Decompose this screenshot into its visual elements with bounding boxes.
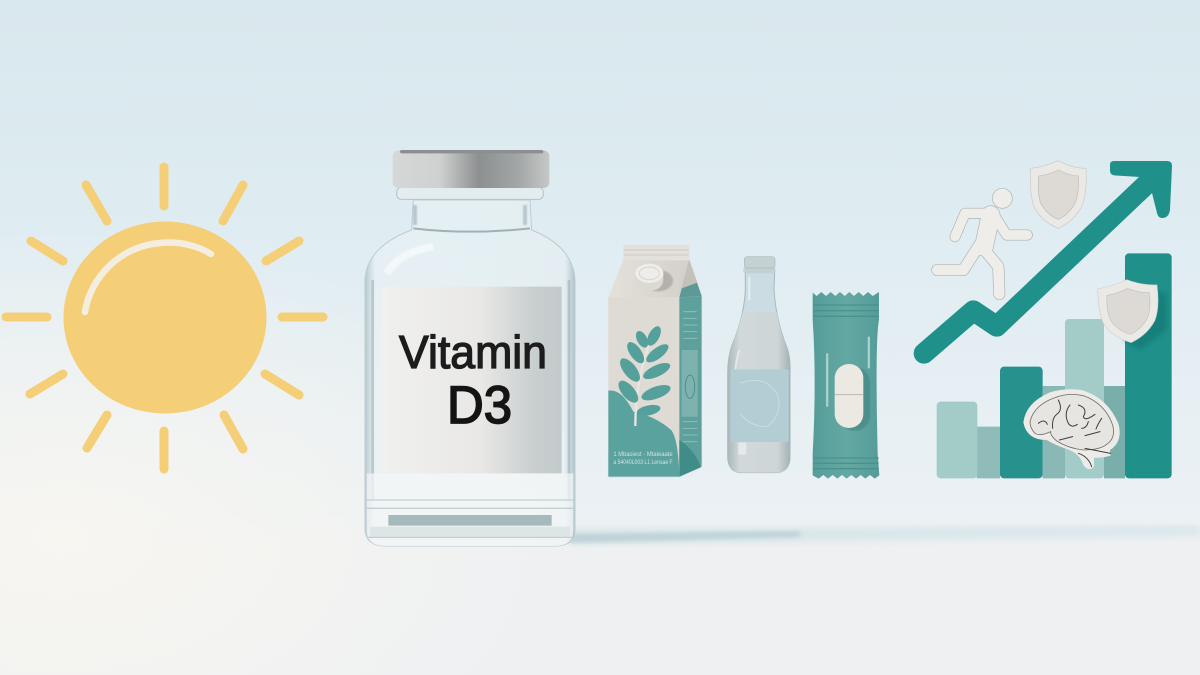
glass reflections [373, 205, 569, 500]
sachet crimps [813, 305, 879, 469]
bottle cap [744, 257, 775, 268]
arrow [924, 161, 1172, 353]
sachet with capsule [813, 292, 879, 479]
carton teal hill [608, 390, 679, 477]
icon: upper shield [1030, 161, 1086, 228]
icon: runner [937, 188, 1027, 294]
bottle label [731, 369, 789, 442]
vitamin d3 glass bottle [365, 150, 575, 546]
bottle lower reflection [738, 443, 746, 455]
bottle body [365, 200, 575, 546]
carton front face [608, 297, 679, 477]
floor shadow [570, 526, 1200, 545]
glass bottle with liquid [728, 257, 790, 473]
growth chart with icons [924, 161, 1172, 478]
carton shadow [608, 453, 702, 477]
bottle liquid [728, 312, 790, 473]
label text: D3 [447, 376, 512, 435]
carton small print: 1 Mbasiest · Mtaleaate [613, 451, 673, 458]
bottle rim [743, 267, 776, 273]
bottle cap [393, 150, 549, 188]
bottle base [367, 500, 574, 537]
lower shield shadow [1123, 287, 1167, 350]
sun disc [64, 222, 266, 414]
icon: lower shield [1097, 278, 1161, 345]
capsule seam [835, 393, 863, 396]
bottle lower glass [367, 473, 573, 546]
sachet body [813, 292, 879, 479]
icon: sun [6, 167, 323, 469]
bar chart [937, 253, 1172, 478]
milk carton: a 54040L003 L1 Lensae F [613, 459, 673, 466]
carton top ridge [623, 245, 689, 260]
carton cap [635, 264, 673, 291]
sachet print [826, 337, 870, 407]
sun rays [6, 167, 323, 469]
carton side opening [679, 260, 702, 297]
carton gable [608, 260, 689, 297]
label text: Vitamin [399, 326, 547, 378]
bottle glass [728, 272, 790, 473]
bottle neck ring [397, 187, 543, 199]
capsule shadow [839, 367, 870, 431]
bottle highlight [735, 277, 749, 380]
capsule [835, 364, 863, 428]
bottle label [381, 287, 562, 473]
milk carton [608, 245, 702, 477]
icon: leaf sprig [615, 324, 672, 426]
carton side face [679, 296, 702, 477]
label text [399, 326, 547, 435]
icon: brain [1023, 389, 1120, 469]
sun highlight [85, 243, 211, 312]
